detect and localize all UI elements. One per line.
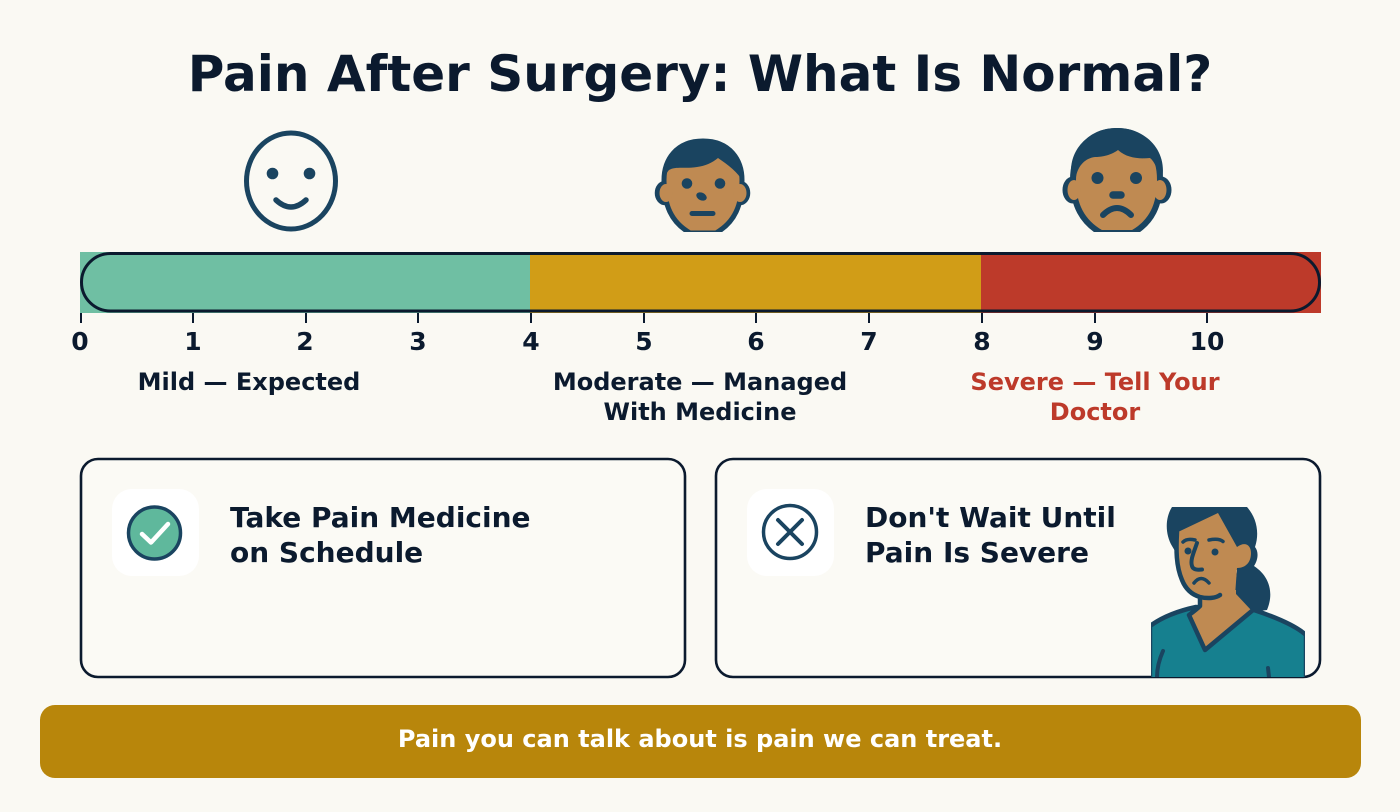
scale ticks and numbers: 5 <box>635 327 653 356</box>
scale ticks and numbers: 0 <box>71 327 89 356</box>
scale ticks and numbers: 10 <box>1190 327 1224 356</box>
scale ticks and numbers: 8 <box>973 327 991 356</box>
scale ticks and numbers: 1 <box>184 327 202 356</box>
title: Pain After Surgery: What Is Normal? <box>188 45 1212 103</box>
scale ticks and numbers: 6 <box>747 327 765 356</box>
pain scale bar <box>80 252 1321 313</box>
label: moderate: Moderate — Managed <box>553 368 847 396</box>
card text: on Schedule <box>230 536 423 569</box>
scale ticks and numbers: 3 <box>409 327 427 356</box>
icon: check mark <box>112 489 199 576</box>
card text: Pain Is Severe <box>865 536 1089 569</box>
icon: smiling face <box>246 133 336 229</box>
illustration: worried woman <box>1150 507 1306 680</box>
card text: Don't Wait Until <box>865 501 1116 534</box>
scale ticks and numbers: 9 <box>1086 327 1104 356</box>
label: severe: Doctor <box>1050 398 1140 426</box>
scale ticks and numbers: 4 <box>522 327 540 356</box>
footer banner: Pain you can talk about is pain we can treat. <box>398 725 1002 753</box>
footer banner <box>40 705 1361 778</box>
sleeve lines <box>1157 651 1163 677</box>
neck and chest <box>1190 590 1251 650</box>
icon: frowning face <box>1065 128 1169 233</box>
panel: do not wait <box>716 459 1320 680</box>
brows, eyes, nose, mouth <box>1183 539 1195 542</box>
label: severe: Severe — Tell Your <box>970 368 1220 396</box>
scale ticks and numbers: 7 <box>860 327 878 356</box>
icon: neutral face <box>657 139 748 233</box>
shirt <box>1150 607 1306 680</box>
face <box>1177 513 1251 596</box>
scale ticks and numbers: 2 <box>296 327 314 356</box>
label: moderate: With Medicine <box>604 398 796 426</box>
icon: x mark <box>747 489 834 576</box>
hair and ponytail <box>1167 507 1270 612</box>
scale ticks and numbers <box>71 313 1224 356</box>
label: mild: Mild — Expected <box>138 368 360 396</box>
panel: take pain medicine <box>81 459 685 677</box>
card text: Take Pain Medicine <box>230 501 531 534</box>
